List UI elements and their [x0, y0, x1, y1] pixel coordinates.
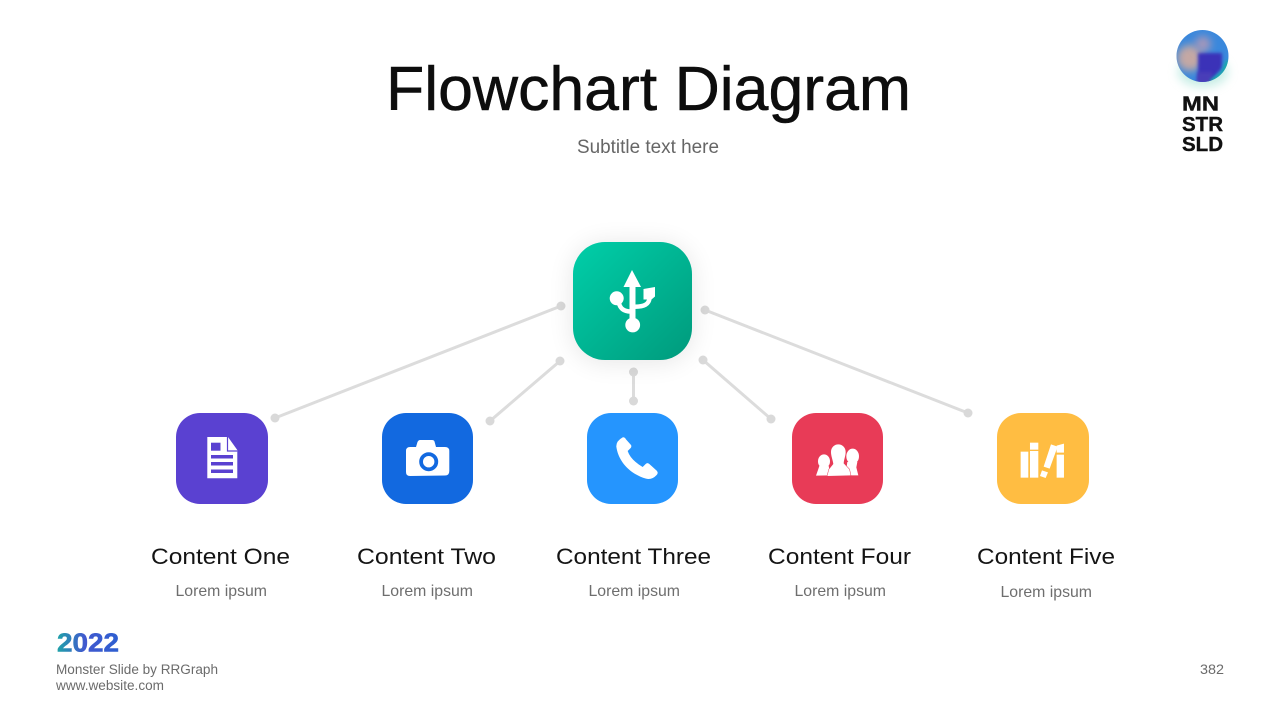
label: Content One: Lorem ipsum: [176, 583, 267, 600]
label: Content Five: [977, 544, 1115, 601]
label: Content Four: [768, 544, 911, 600]
icon: document: [207, 437, 237, 478]
tile: Content Three: [587, 413, 678, 504]
connector: hub to Content One: [270, 302, 566, 422]
label: Content Two: Content Two: [357, 544, 496, 569]
label: Content One: Content One: [151, 544, 290, 569]
label: Content Two: Lorem ipsum: [382, 583, 473, 600]
connector: hub to Content Four: [698, 356, 776, 424]
connector: hub to Content Two: [486, 356, 564, 426]
connector: hub to Content Three: [629, 368, 638, 406]
logo wordmark: SLD: [1182, 134, 1223, 156]
page number: 382: [1200, 661, 1224, 677]
footer credits: [55, 662, 218, 693]
label: Content Four: Lorem ipsum: [794, 583, 886, 600]
logo wordmark: [1182, 94, 1224, 156]
tile: Content Four: [792, 413, 883, 504]
footer year: 2022: [57, 628, 119, 658]
title: Flowchart Diagram: [386, 55, 911, 124]
icon: group of people: [816, 444, 859, 476]
logo wordmark: MN: [1182, 94, 1219, 116]
label: Content Two: [357, 544, 496, 600]
footer credits: Monster Slide by RRGraph: [56, 662, 218, 677]
label: Content One: [151, 544, 290, 600]
subtitle: Subtitle text here: [577, 136, 719, 158]
tile: Content Two: [382, 413, 473, 504]
label: Content Three: Content Three: [556, 544, 711, 569]
tile: Content One: [176, 413, 268, 504]
footer credits: www.website.com: [55, 678, 164, 693]
logo: [1174, 30, 1232, 152]
logo sphere: [1174, 30, 1232, 92]
label: Content Five: Lorem ipsum: [1000, 584, 1092, 601]
connector: hub to Content Five: [700, 306, 972, 418]
label: Content Three: Lorem ipsum: [588, 583, 680, 600]
label: Content Three: [556, 544, 711, 600]
icon: camera: [406, 440, 449, 476]
logo wordmark: STR: [1182, 114, 1224, 136]
icon: books: [1021, 443, 1064, 478]
icon: phone: [616, 437, 658, 479]
hub tile with USB icon: [573, 242, 692, 362]
icon: USB: [610, 270, 655, 332]
tile: Content Five: [997, 413, 1089, 504]
label: Content Four: Content Four: [768, 544, 911, 569]
label: Content Five: Content Five: [977, 544, 1115, 569]
